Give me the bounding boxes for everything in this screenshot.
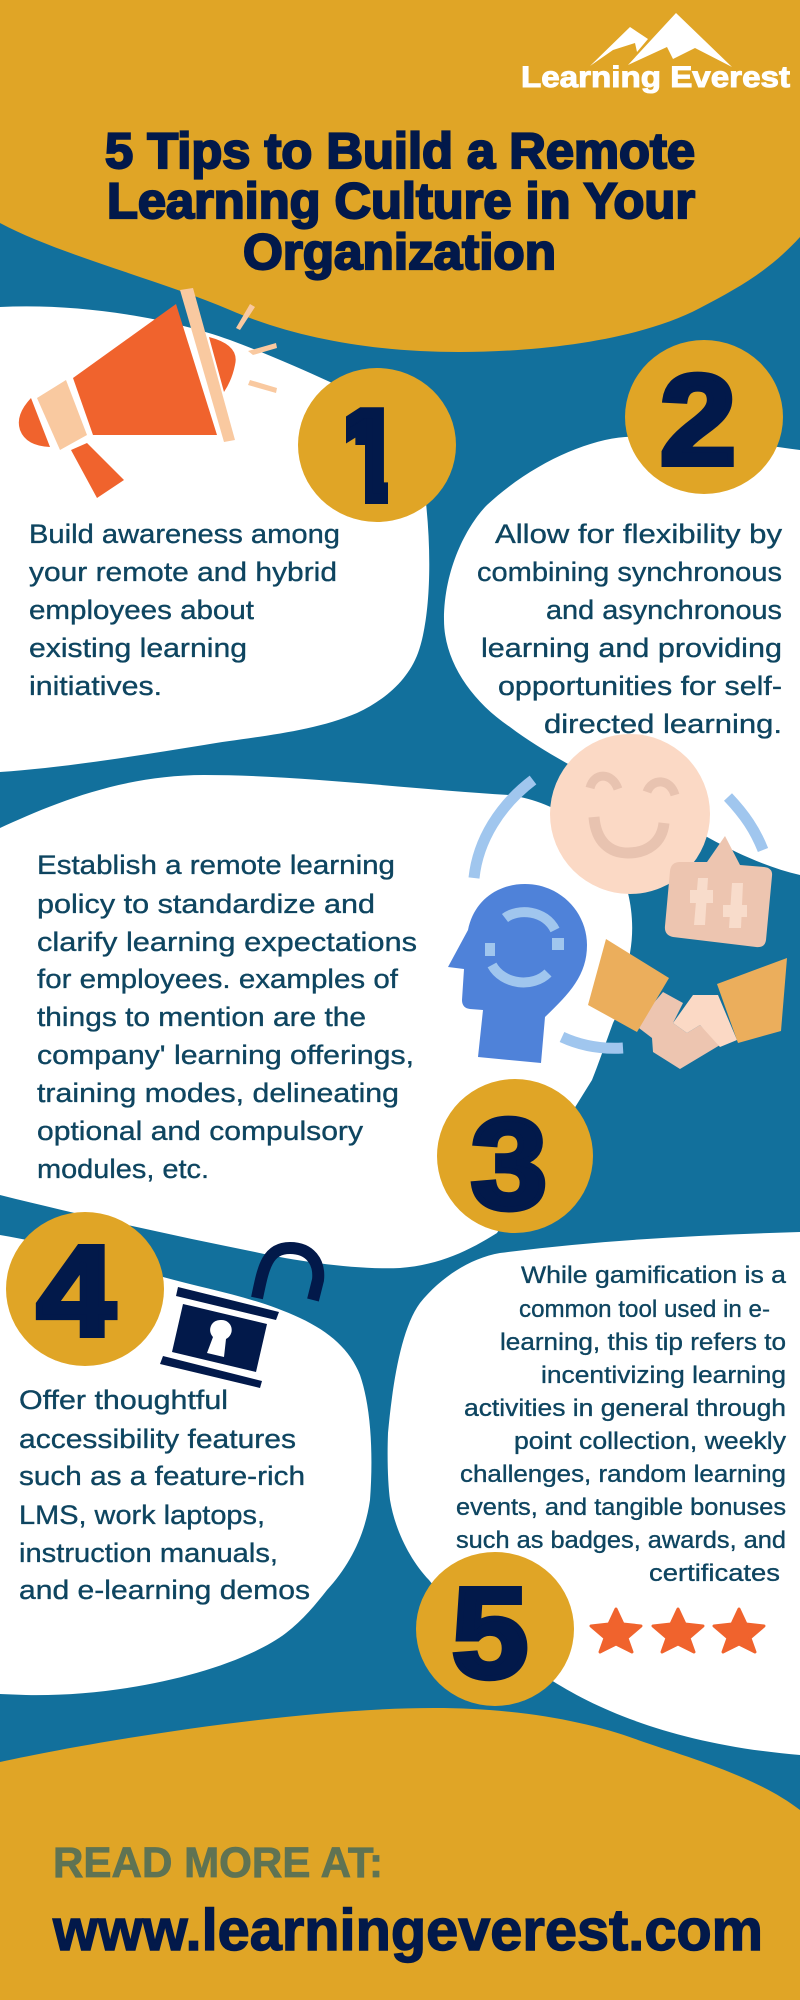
text: tip 3: modules, etc. — [37, 1154, 209, 1184]
number badge 3: 3 — [471, 1093, 547, 1236]
number badge 4 — [6, 1212, 164, 1366]
icon: open padlock — [160, 1248, 318, 1388]
number badge 1 — [298, 368, 456, 529]
panel: tip 1 white blob — [0, 306, 429, 772]
text: tip 1: your remote and hybrid — [29, 557, 337, 587]
text: tip 3: for employees. examples of — [37, 964, 399, 994]
text: tip 5: certificates — [649, 1560, 780, 1587]
panel: tip 3 white blob — [0, 775, 632, 1268]
text: tip 2: learning and providing — [481, 633, 782, 663]
text: tip 5: such as badges, awards, and — [456, 1527, 786, 1554]
icon: mountains — [590, 13, 732, 67]
text: tip 5: incentivizing learning — [541, 1362, 786, 1389]
panel: tip 4 white blob — [0, 1235, 371, 1695]
text: tip 4 — [19, 1385, 310, 1605]
number badge 2: 2 — [660, 349, 736, 492]
call to action: read more: READ MORE AT: — [53, 1839, 383, 1887]
icon: blue head — [448, 884, 587, 1063]
text: tip 3: things to mention are the — [37, 1002, 366, 1032]
text: tip 4: such as a feature-rich — [19, 1461, 305, 1491]
icon: speech bubble with sliders — [665, 836, 772, 947]
text: tip 2: directed learning. — [544, 709, 782, 739]
text: tip 5: challenges, random learning — [460, 1461, 786, 1488]
title: 5 Tips to Build a Remote — [105, 123, 695, 179]
text: tip 2: opportunities for self- — [498, 671, 782, 701]
text: tip 4: and e-learning demos — [19, 1575, 310, 1605]
top gold header shape — [0, 0, 800, 352]
text: tip 3 — [37, 850, 417, 1184]
text: tip 4: Offer thoughtful — [19, 1385, 228, 1415]
text: tip 5 — [456, 1262, 787, 1587]
text: tip 4: LMS, work laptops, — [19, 1500, 265, 1530]
text: tip 5: activities in general through — [464, 1395, 786, 1422]
light blue arcs — [474, 780, 763, 1048]
title: Organization — [243, 224, 556, 280]
text: tip 2: and asynchronous — [546, 595, 782, 625]
text: tip 5: While gamification is a — [521, 1262, 787, 1289]
text: tip 5: point collection, weekly — [514, 1428, 786, 1455]
bottom gold footer shape — [0, 1708, 800, 2000]
number badge 2 — [625, 340, 783, 494]
text: tip 1: Build awareness among — [29, 519, 340, 549]
text: tip 1: existing learning — [29, 633, 247, 663]
illustration: people and collaboration — [448, 734, 787, 1069]
text: tip 3: company' learning offerings, — [37, 1040, 414, 1070]
text: tip 4: instruction manuals, — [19, 1538, 278, 1568]
logo wordmark: Learning Everest — [521, 61, 790, 94]
text: tip 3: Establish a remote learning — [37, 850, 395, 880]
icon: smiling face — [550, 734, 710, 894]
text: tip 3: clarify learning expectations — [37, 927, 417, 957]
text: tip 2: Allow for flexibility by — [495, 519, 783, 549]
number badge 5 — [416, 1552, 574, 1706]
number badge 5: 5 — [452, 1562, 528, 1705]
text: tip 5: learning, this tip refers to — [500, 1329, 786, 1356]
title: Learning Culture in Your — [107, 173, 695, 229]
panel: tip 5 white blob — [388, 1232, 800, 1755]
number badge 4: 4 — [37, 1220, 115, 1363]
number badge 1: 1 — [331, 386, 402, 529]
icon: handshake — [588, 939, 787, 1069]
panel: tip 2 white blob — [444, 437, 800, 875]
call to action: website url: www.learningeverest.com — [52, 1898, 763, 1963]
text: tip 1: initiatives. — [29, 671, 162, 701]
icon: three stars — [591, 1609, 764, 1652]
number badge 3 — [437, 1079, 593, 1236]
text: tip 2 — [477, 519, 783, 739]
title — [105, 123, 695, 280]
text: tip 3: policy to standardize and — [37, 889, 375, 919]
text: tip 5: events, and tangible bonuses — [456, 1494, 786, 1521]
text: tip 5: common tool used in e- — [519, 1296, 770, 1323]
text: tip 4: accessibility features — [19, 1424, 296, 1454]
text: tip 3: training modes, delineating — [37, 1078, 399, 1108]
text: tip 2: combining synchronous — [477, 557, 782, 587]
text: tip 1 — [29, 519, 340, 701]
logo: Learning Everest — [521, 13, 790, 94]
icon: megaphone — [19, 288, 277, 498]
text: tip 1: employees about — [29, 595, 255, 625]
text: tip 3: optional and compulsory — [37, 1116, 364, 1146]
